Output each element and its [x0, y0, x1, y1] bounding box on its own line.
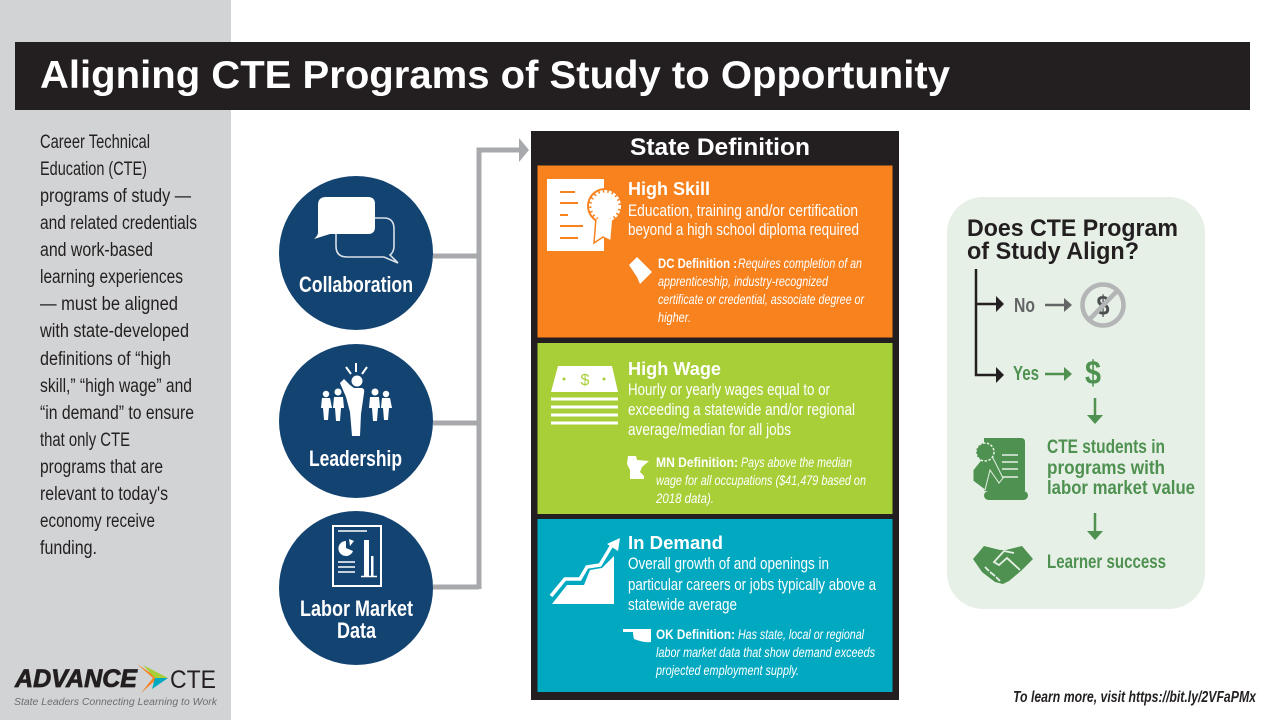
icon: stack of money: [551, 366, 618, 423]
arrow: connector from circles to state definition: [433, 138, 529, 589]
title banner: Aligning CTE Programs of Study to Opportunity: [40, 54, 950, 97]
text block: OK definition: projected employment supply.: [655, 663, 799, 678]
text block: CTE students: [1047, 437, 1195, 499]
text block: introduction: economy receive: [40, 511, 155, 532]
text block: introduction: definitions of “high: [40, 349, 171, 370]
icon: report with charts: [333, 526, 381, 586]
icon: no money: $: [1096, 290, 1110, 321]
icon: Minnesota shape: [627, 456, 649, 479]
text block: introduction: and related credentials: [40, 213, 197, 234]
icon: leader with team: [321, 363, 392, 436]
text block: MN definition: MN Definition:: [656, 455, 738, 470]
text block: MN definition: 2018 data).: [655, 491, 714, 506]
arrow: no: [1045, 298, 1072, 312]
text: learner success: Learner success: [1047, 552, 1166, 573]
text block: DC definition: DC Definition :: [658, 256, 737, 271]
icon: speech bubbles: [314, 197, 398, 263]
logo: Advance CTE: State Leaders Connecting Learning to Work: [14, 696, 218, 708]
icon: diploma scroll: [973, 438, 1028, 500]
text block: introduction: skill,” “high wage” and: [40, 376, 192, 397]
circle: Labor Market Data: Data: [337, 618, 377, 643]
text block: introduction: learning experiences: [40, 267, 183, 288]
text block: introduction: funding.: [40, 538, 97, 559]
text block: OK definition: labor market data that show demand exceeds: [656, 645, 875, 660]
text block: CTE students: CTE students in: [1047, 437, 1165, 458]
panel: high wage: Hourly or yearly wages equal to or: [628, 380, 830, 399]
circle: Collaboration: [279, 176, 433, 330]
icon: no money: [1082, 284, 1124, 326]
text block: OK definition: OK Definition:: [656, 627, 735, 642]
text block: introduction: and work-based: [40, 240, 153, 261]
circle: Leadership: [279, 344, 433, 498]
text block: DC definition: [658, 256, 864, 325]
icon: certificate: [547, 179, 623, 251]
label: Yes: Yes: [1013, 363, 1039, 385]
panel: high wage: High Wage: [628, 359, 721, 379]
icon: handshake: [973, 546, 1033, 584]
panel: high skill: High Skill: [628, 179, 710, 199]
text block: introduction: with state-developed: [39, 321, 189, 342]
arrow: down to learner success: [1087, 513, 1103, 540]
panel: in demand: In Demand: [628, 533, 723, 553]
panel: high wage: exceeding a statewide and/or regional: [628, 400, 855, 419]
panel: high skill: Education, training and/or certification: [628, 201, 858, 220]
text block: DC definition: apprenticeship, industry-recognized: [658, 274, 828, 289]
text block: introduction: programs that are: [40, 457, 163, 478]
text block: DC definition: higher.: [658, 310, 691, 325]
logo: Advance CTE: [14, 664, 218, 708]
panel: does CTE program of study align: [947, 197, 1205, 609]
circle: Leadership: Leadership: [309, 446, 402, 471]
text block: introduction: programs of study —: [40, 186, 191, 207]
heading: alignment question: [967, 215, 1178, 265]
logo: Advance CTE: CTE: [170, 666, 216, 694]
icon: growth chart: [551, 538, 620, 604]
text block: introduction: [39, 132, 197, 559]
text block: DC definition: certificate or credential, associate degree or: [658, 292, 864, 307]
panel: in demand: Overall growth of and openings in: [628, 554, 829, 573]
text block: introduction: — must be aligned: [40, 294, 178, 315]
text block: introduction: “in demand” to ensure: [40, 403, 194, 424]
icon: stack of money: $: [581, 372, 590, 389]
circle: Collaboration: Collaboration: [299, 272, 413, 297]
panel: in demand: particular careers or jobs typically above a: [628, 575, 876, 594]
title banner: [15, 42, 1250, 110]
text block: OK definition: [655, 627, 875, 678]
text block: introduction: Career Technical: [40, 132, 150, 153]
text block: MN definition: [655, 455, 866, 506]
panel: state definition: [531, 131, 899, 700]
text block: OK definition: Has state, local or regional: [738, 627, 865, 642]
circle: Labor Market Data: Labor Market: [300, 596, 414, 621]
text block: CTE students: programs with: [1047, 458, 1165, 479]
icon: dollar: $: [1085, 354, 1101, 391]
text block: MN definition: wage for all occupations ($41,479 based on: [656, 473, 866, 488]
panel: high skill: [538, 166, 892, 338]
icon: DC shape: [629, 257, 652, 284]
panel: in demand: statewide average: [628, 595, 737, 614]
text block: CTE students: labor market value: [1047, 478, 1195, 499]
text block: introduction: relevant to today's: [40, 484, 168, 505]
text block: introduction: Education (CTE): [40, 159, 147, 180]
arrow: yes: [1045, 367, 1072, 381]
arrow: decision tree: [976, 269, 1004, 383]
label: No: No: [1014, 295, 1035, 317]
arrow: down to students: [1087, 398, 1103, 424]
panel: in demand: [538, 519, 892, 692]
icon: Oklahoma shape: [623, 629, 651, 642]
heading: alignment question: of Study Align?: [967, 238, 1139, 265]
logo: Advance CTE: ADVANCE: [14, 665, 138, 693]
panel: grey sidebar: [0, 0, 231, 720]
text block: MN definition: Pays above the median: [741, 455, 852, 470]
text block: introduction: that only CTE: [40, 430, 130, 451]
panel: high skill: beyond a high school diploma required: [628, 220, 859, 239]
circle: Labor Market Data: [279, 511, 433, 665]
text block: DC definition: Requires completion of an: [738, 256, 862, 271]
panel: high wage: [538, 343, 892, 514]
heading: alignment question: Does CTE Program: [967, 215, 1178, 242]
heading: state definition: State Definition: [630, 134, 810, 161]
panel: high wage: average/median for all jobs: [628, 420, 791, 439]
